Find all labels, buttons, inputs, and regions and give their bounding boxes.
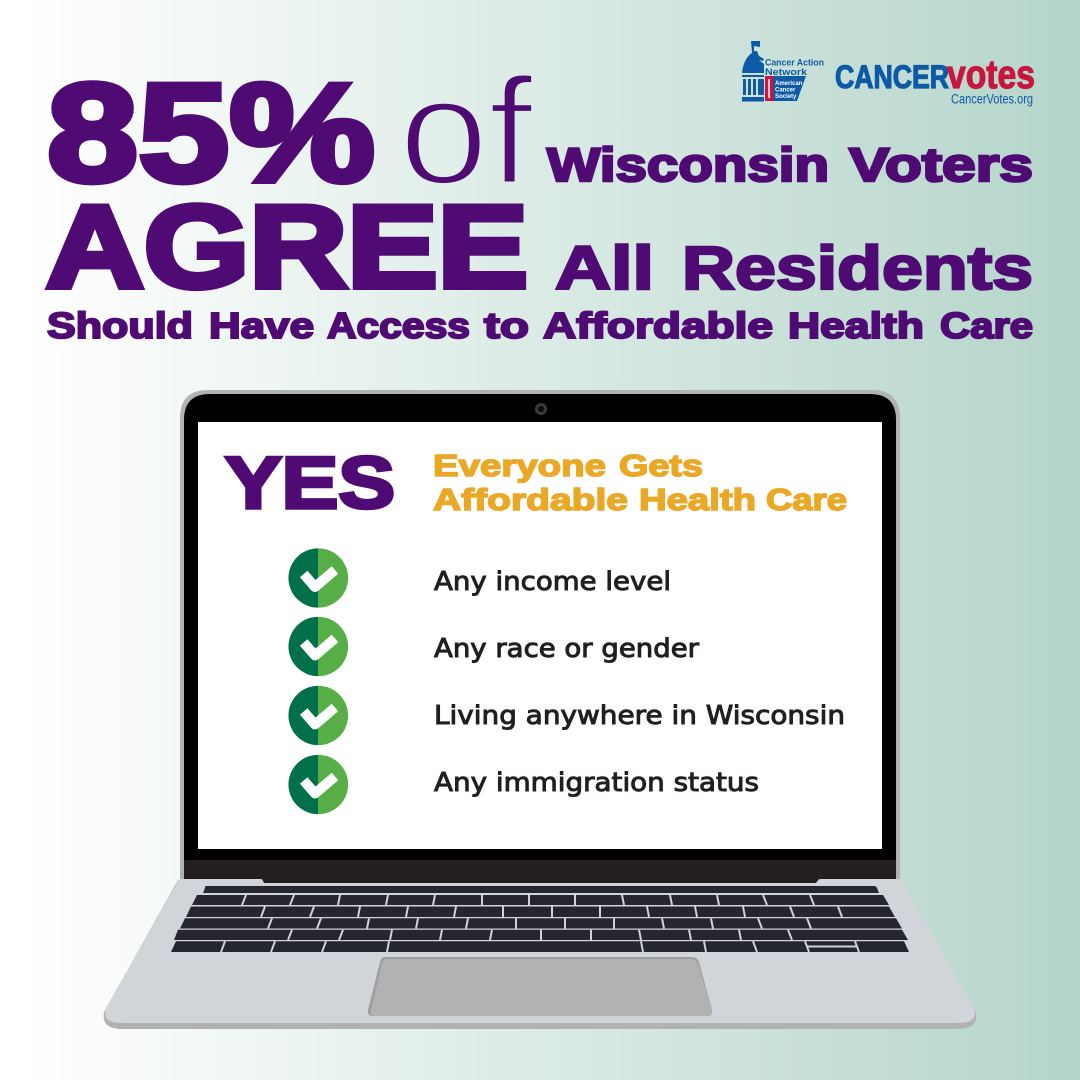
item: Any race or gender: Any race or gender xyxy=(434,634,699,664)
headline: Should Have Access to Affordable Health Care: Care xyxy=(940,305,1033,346)
item: Any race or gender xyxy=(288,617,699,676)
subheading: Everyone Gets Affordable Health Care: Everyone xyxy=(433,448,606,483)
headline: Should Have Access to Affordable Health Care: Access xyxy=(327,305,470,346)
item: Any immigration status: Any immigration status xyxy=(434,768,759,798)
headline: 85%: 85% xyxy=(47,54,375,211)
headline: Should Have Access to Affordable Health Care: Affordable xyxy=(543,305,773,346)
subheading: Everyone Gets Affordable Health Care xyxy=(433,448,847,517)
headline: All Residents xyxy=(555,234,1033,302)
logo badge: American Cancer Society xyxy=(765,76,806,101)
headline: Should Have Access to Affordable Health Care: Health xyxy=(788,305,924,346)
item: Living anywhere in Wisconsin xyxy=(288,686,845,745)
webcam xyxy=(535,403,547,415)
headline: Should Have Access to Affordable Health Care: Have xyxy=(209,305,314,346)
logo badge: American Cancer Society: Society xyxy=(775,94,797,100)
headline: of: of xyxy=(399,46,534,216)
logo badge: American Cancer Society: American xyxy=(775,81,803,87)
laptop illustration xyxy=(104,390,976,1029)
item: Any income level: Any income level xyxy=(434,567,671,597)
laptop lid xyxy=(180,390,900,885)
logo text: Cancer Action Network: Cancer Action xyxy=(765,58,824,68)
icon: capitol dome xyxy=(742,41,764,102)
icon: check xyxy=(288,617,348,676)
keyboard xyxy=(171,886,909,952)
laptop base xyxy=(104,879,976,1029)
wordmark votes: votes xyxy=(947,53,1035,97)
title xyxy=(46,46,1033,346)
item: Any income level xyxy=(288,548,671,608)
headline: Wisconsin Voters: Wisconsin xyxy=(547,138,829,191)
headline: Should Have Access to Affordable Health Care: to xyxy=(484,305,529,346)
headline: Wisconsin Voters: Voters xyxy=(849,138,1033,191)
logo badge: American Cancer Society: Cancer xyxy=(775,88,796,94)
subheading: Everyone Gets Affordable Health Care: Affordable xyxy=(433,482,628,517)
logo: Cancer Action Network: Network xyxy=(765,67,808,78)
item: Any immigration status xyxy=(288,755,759,814)
logo: Cancer Action Network xyxy=(742,41,824,102)
headline: All Residents: Residents xyxy=(682,234,1033,302)
logo: CancerVotes xyxy=(835,53,1035,106)
headline: All Residents: All xyxy=(555,234,654,302)
checklist xyxy=(288,548,845,814)
YES heading: YES xyxy=(225,443,395,524)
headline: Should Have Access to Affordable Health Care xyxy=(47,305,1033,346)
icon: check xyxy=(288,686,348,745)
wordmark CANCER: CANCER xyxy=(835,59,949,95)
trackpad xyxy=(368,957,712,1016)
icon: check xyxy=(288,755,348,814)
subheading: Everyone Gets Affordable Health Care: Health xyxy=(639,482,756,517)
item: Living anywhere in Wisconsin: Living anywhere in Wisconsin xyxy=(434,701,845,731)
logo url: CancerVotes.org xyxy=(951,92,1033,106)
laptop screen xyxy=(198,422,882,849)
subheading: Everyone Gets Affordable Health Care: Care xyxy=(766,482,847,517)
icon: check xyxy=(288,548,348,608)
headline: AGREE: AGREE xyxy=(46,181,528,312)
headline: Wisconsin Voters xyxy=(547,138,1033,191)
headline: Should Have Access to Affordable Health Care: Should xyxy=(47,305,193,346)
subheading: Everyone Gets Affordable Health Care: Gets xyxy=(619,448,703,483)
